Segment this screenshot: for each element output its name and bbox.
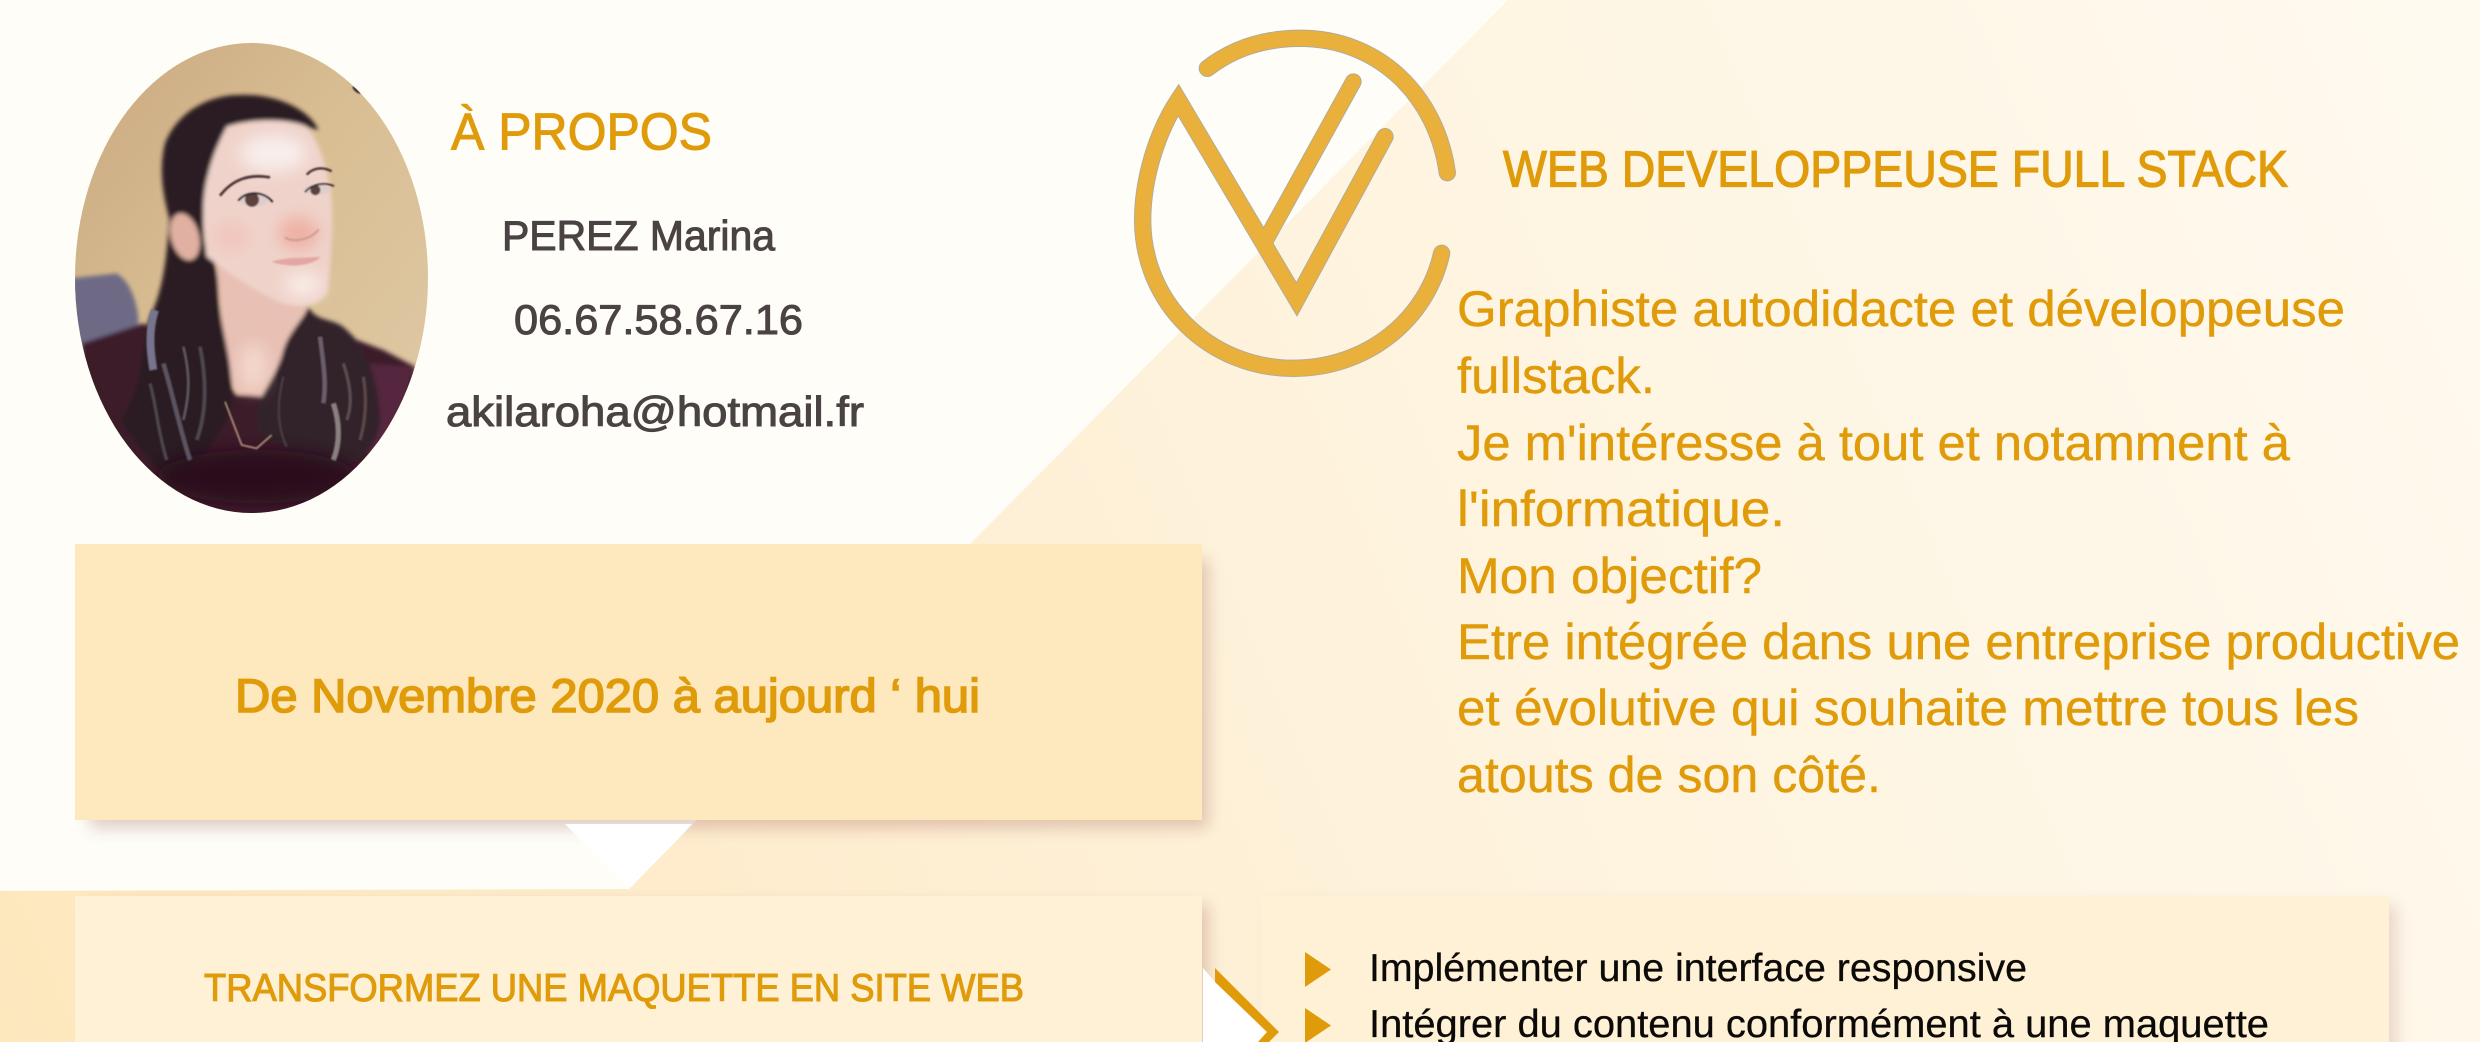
date heading: De Novembre 2020 à aujourd ‘ hui xyxy=(235,669,980,722)
bullet one xyxy=(1305,952,1331,987)
arrow: chevron connector xyxy=(1203,968,1279,1042)
contact name: PEREZ Marina xyxy=(502,212,776,259)
bullet two xyxy=(1305,1008,1331,1042)
logo: circled V mark xyxy=(1143,38,1447,368)
description text block: Etre intégrée dans une entreprise productive xyxy=(1457,614,2460,670)
description text block: Graphiste autodidacte et développeuse xyxy=(1457,281,2345,337)
contact email: akilaroha@hotmail.fr xyxy=(446,388,864,435)
panel: skills list card xyxy=(1261,896,2396,1042)
heading: à propos: À PROPOS xyxy=(451,104,712,162)
description text block: et évolutive qui souhaite mettre tous les xyxy=(1457,680,2359,736)
description text block: Mon objectif? xyxy=(1457,548,1762,604)
description text block: fullstack. xyxy=(1457,348,1655,404)
panel: task title card xyxy=(75,896,1208,1042)
panel: date period xyxy=(75,544,1208,889)
description text block xyxy=(1457,281,2460,803)
description text block: atouts de son côté. xyxy=(1457,747,1881,803)
portrait photo xyxy=(70,40,433,530)
description text block: l'informatique. xyxy=(1457,481,1785,537)
description text block: Je m'intéresse à tout et notamment à xyxy=(1457,415,2290,471)
job title: WEB DEVELOPPEUSE FULL STACK xyxy=(1503,140,2288,198)
task title: TRANSFORMEZ UNE MAQUETTE EN SITE WEB xyxy=(204,967,1024,1010)
contact phone: 06.67.58.67.16 xyxy=(514,296,803,343)
skill one: Implémenter une interface responsive xyxy=(1369,947,2027,990)
